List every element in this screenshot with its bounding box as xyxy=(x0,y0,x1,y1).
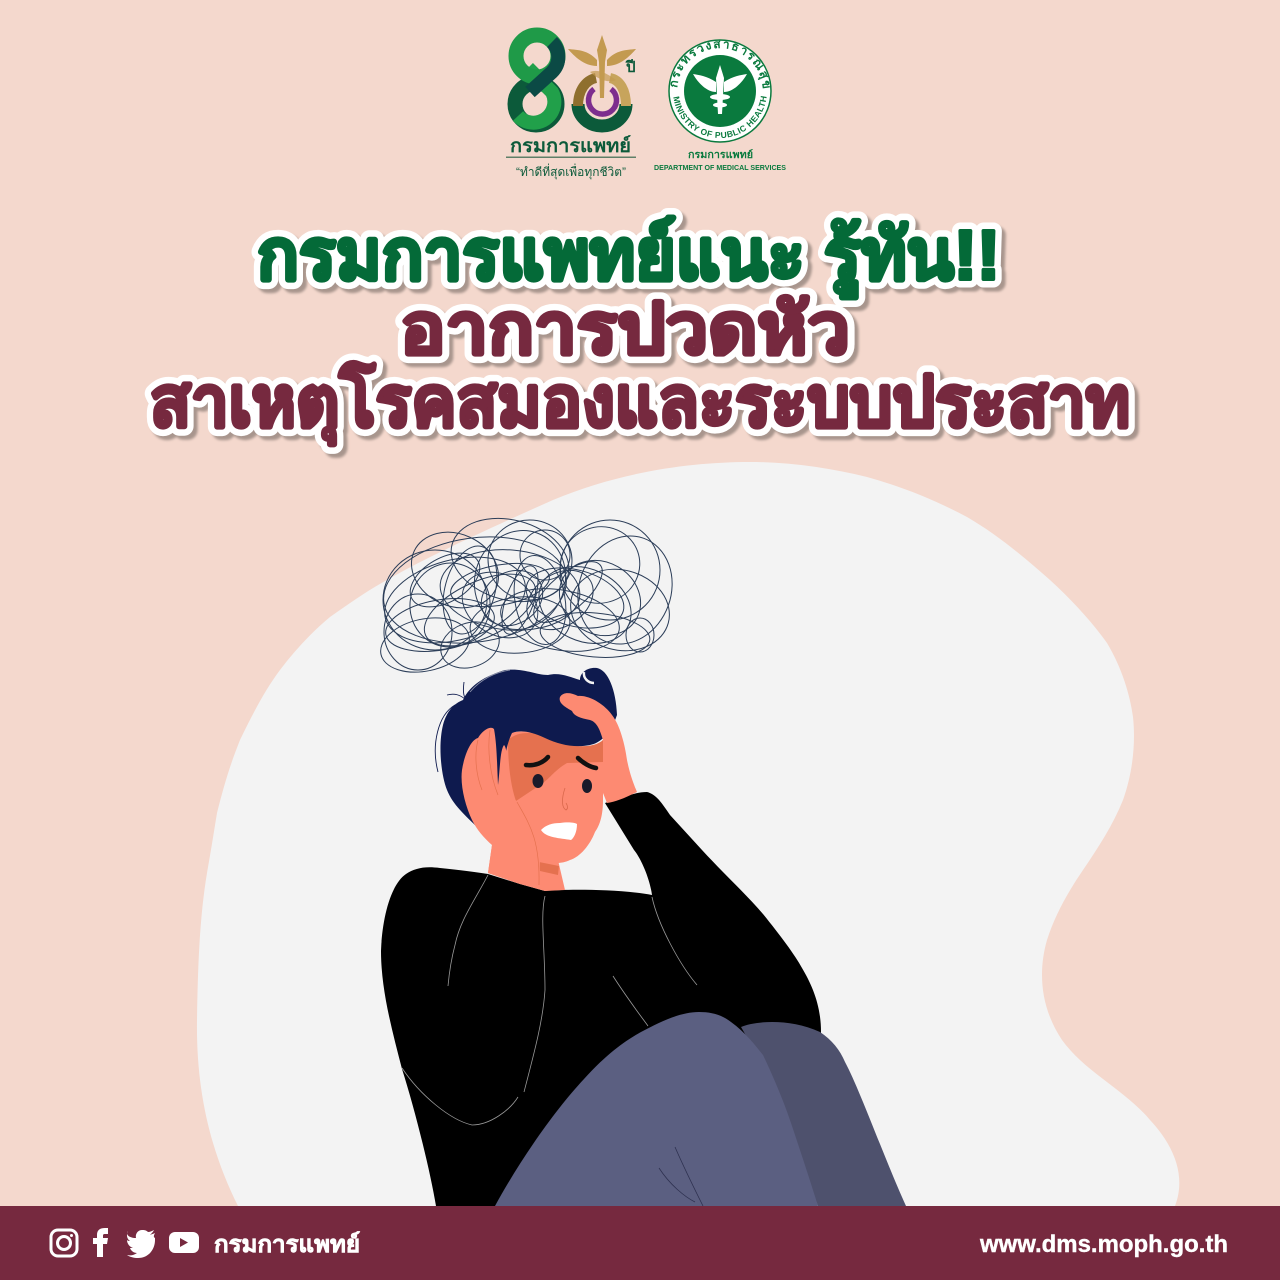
title line 1: กรมการแพทย์แนะ รู้ทัน!! xyxy=(257,216,1000,299)
illustration: stressed person xyxy=(381,668,906,1206)
icon: tangled scribble xyxy=(375,506,687,680)
title line 2: อาการปวดหัว xyxy=(400,290,850,368)
title line 3: สาเหตุโรคสมองและระบบประสาท xyxy=(150,361,1130,446)
neck shadow xyxy=(539,862,559,875)
footer bar xyxy=(0,1206,1280,1280)
title line 1: กรมการแพทย์แนะ รู้ทัน!! xyxy=(261,220,1004,303)
seal text top: กระทรวงสาธารณสุข xyxy=(670,40,770,88)
department name thai: กรมการแพทย์ xyxy=(688,149,753,161)
logo: 80th anniversary xyxy=(506,35,636,180)
leg crease xyxy=(659,1147,703,1206)
neck xyxy=(488,840,565,891)
numeral 8 xyxy=(515,35,558,125)
eyebrows xyxy=(526,757,596,768)
hair curl xyxy=(584,672,594,683)
icon: twitter xyxy=(127,1230,155,1258)
logo: ministry of public health seal xyxy=(654,39,786,172)
logo slogan: “ทำดีที่สุดเพื่อทุกชีวิต” xyxy=(516,163,626,180)
title line 2: อาการปวดหัว xyxy=(404,294,854,372)
back leg xyxy=(741,1022,906,1206)
numeral 0 with ring xyxy=(578,78,626,126)
hand finger lines xyxy=(476,730,539,885)
background blob xyxy=(197,462,1179,1206)
mouth xyxy=(541,822,577,840)
face shadow xyxy=(508,733,603,801)
nose xyxy=(562,788,568,810)
title line 2: อาการปวดหัว xyxy=(400,290,850,368)
hoodie and raised arm xyxy=(381,792,821,1206)
front leg xyxy=(495,1012,818,1206)
department name english: DEPARTMENT OF MEDICAL SERVICES xyxy=(654,165,786,172)
footer agency name: กรมการแพทย์ xyxy=(214,1231,360,1257)
stray hairs xyxy=(435,670,510,772)
icon: instagram xyxy=(51,1230,77,1256)
gold caduceus xyxy=(568,35,636,98)
year label: ปี xyxy=(625,59,636,76)
title line 3: สาเหตุโรคสมองและระบบประสาท xyxy=(154,365,1134,450)
title line 3: สาเหตุโรคสมองและระบบประสาท xyxy=(150,361,1130,446)
hoodie crease lines xyxy=(402,875,697,1125)
footer website: www.dms.moph.go.th xyxy=(979,1231,1228,1258)
right hand xyxy=(560,693,637,803)
hair xyxy=(440,668,617,828)
eyes xyxy=(532,774,592,793)
seal text bottom: MINISTRY OF PUBLIC HEALTH xyxy=(673,96,767,138)
icon: youtube xyxy=(169,1232,199,1253)
face xyxy=(500,731,603,863)
title xyxy=(150,216,1134,450)
left hand xyxy=(462,728,540,887)
icon: facebook xyxy=(93,1228,108,1257)
logo wordmark: กรมการแพทย์ xyxy=(510,135,631,157)
seal caduceus xyxy=(693,65,747,114)
title line 1: กรมการแพทย์แนะ รู้ทัน!! xyxy=(257,216,1000,299)
